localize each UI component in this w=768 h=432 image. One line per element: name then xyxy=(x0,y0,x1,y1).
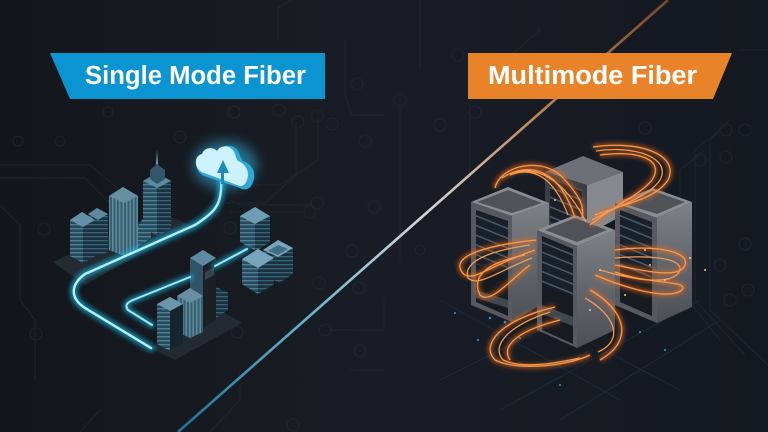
building group: upper city xyxy=(70,150,171,263)
server rack: right xyxy=(615,188,692,323)
heading: Single Mode Fiber: Single Mode Fiber xyxy=(85,62,306,90)
building group: lower city xyxy=(157,250,228,351)
glow particles xyxy=(454,312,666,386)
diagonal divider xyxy=(178,0,668,432)
illustration: multimode server racks xyxy=(440,145,720,420)
heading: Single Mode Fiber xyxy=(50,53,325,99)
server rack: front xyxy=(537,215,615,348)
orange fiber swirls: glow xyxy=(460,145,685,366)
floor grid xyxy=(440,280,720,420)
orange fiber swirls: lines xyxy=(460,145,685,366)
fiber line: branch route xyxy=(126,249,247,325)
building group: right city xyxy=(240,207,293,294)
server rack: left xyxy=(471,187,549,322)
icon: cloud with upload arrow xyxy=(193,141,257,189)
heading: Multimode Fiber: Multimode Fiber xyxy=(488,62,697,90)
city platform: lower xyxy=(150,310,242,360)
server rack: back xyxy=(545,156,623,235)
heading: Multimode Fiber xyxy=(468,53,732,99)
fiber line: main route to cloud xyxy=(74,170,222,348)
illustration: single mode city network xyxy=(53,141,293,360)
city platform: upper xyxy=(53,212,190,285)
orange sparks xyxy=(554,199,706,311)
